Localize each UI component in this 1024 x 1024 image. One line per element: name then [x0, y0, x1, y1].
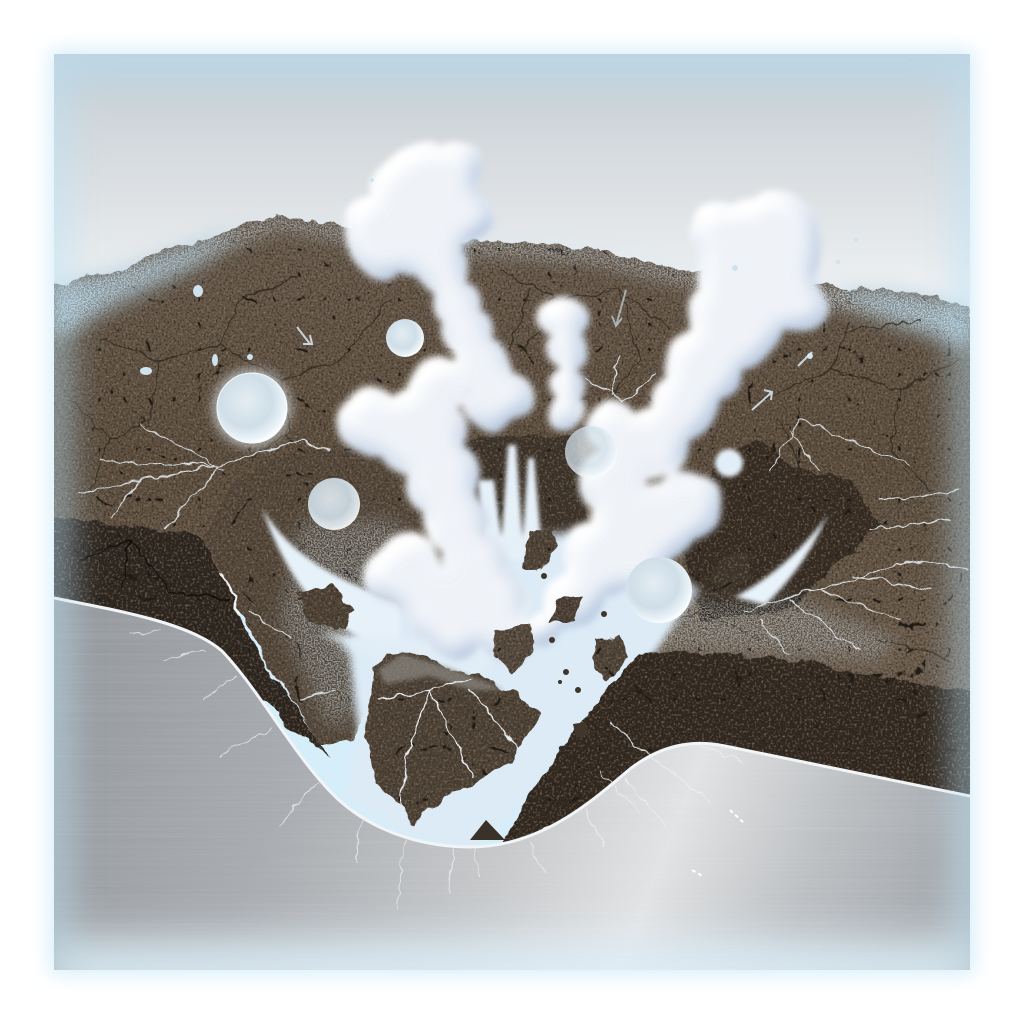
icon: bubble right — [626, 557, 692, 623]
steam wisp, left — [262, 508, 400, 650]
metal plate — [54, 597, 970, 970]
plate nicks — [692, 810, 745, 877]
steam wisp, right — [735, 515, 828, 605]
rock: mid — [548, 596, 584, 624]
plume: left lower — [338, 358, 536, 664]
rock: small — [573, 722, 588, 738]
central steam mass — [340, 530, 700, 650]
crest tint — [54, 228, 970, 350]
dark soil cracks, left — [80, 540, 230, 600]
crater rocks — [298, 524, 752, 840]
icon: bubble large — [217, 373, 287, 443]
white fractures — [80, 355, 968, 755]
sky backdrop — [54, 54, 970, 614]
frost on soil crest — [54, 215, 970, 345]
steam band, lower left — [319, 627, 360, 652]
frost on left wall — [280, 520, 400, 730]
rock: right — [712, 550, 752, 597]
icon: bubble centre — [565, 426, 617, 478]
puff: right tip — [715, 449, 743, 477]
rock: bottom wedge — [470, 820, 505, 840]
rock: left — [298, 585, 356, 630]
lower whitening of plate — [54, 945, 970, 995]
plume: small centre — [541, 294, 589, 431]
plume: right tall — [527, 190, 830, 646]
crater cavity, right — [680, 438, 880, 620]
rock: large — [366, 650, 540, 822]
bubble halo — [212, 368, 292, 448]
top sky vignette — [54, 30, 970, 80]
crater cavity, centre — [463, 434, 586, 538]
icon: bubble lower left — [308, 478, 360, 530]
rock: upper centre — [524, 524, 556, 572]
rock: centre right — [592, 636, 628, 682]
steam centre fans — [476, 442, 544, 558]
crater floor steam — [343, 614, 683, 742]
icon: small arrows — [297, 290, 812, 410]
plate scratches — [132, 630, 745, 908]
rock: debris — [541, 573, 607, 693]
lower dark soil, left — [40, 515, 330, 760]
plumes — [338, 140, 830, 664]
plate bright edge — [54, 598, 970, 847]
soil cracks — [70, 270, 960, 660]
water droplets — [140, 178, 858, 375]
lower dark soil, right — [500, 652, 990, 850]
frost on right rim — [640, 600, 900, 660]
icon: bubble upper — [386, 319, 424, 357]
upper soil layer — [40, 215, 990, 720]
rock: centre — [492, 628, 532, 673]
icon: bubbles — [212, 319, 692, 623]
crater wall, left — [205, 450, 430, 745]
plume: left tall — [342, 140, 533, 434]
